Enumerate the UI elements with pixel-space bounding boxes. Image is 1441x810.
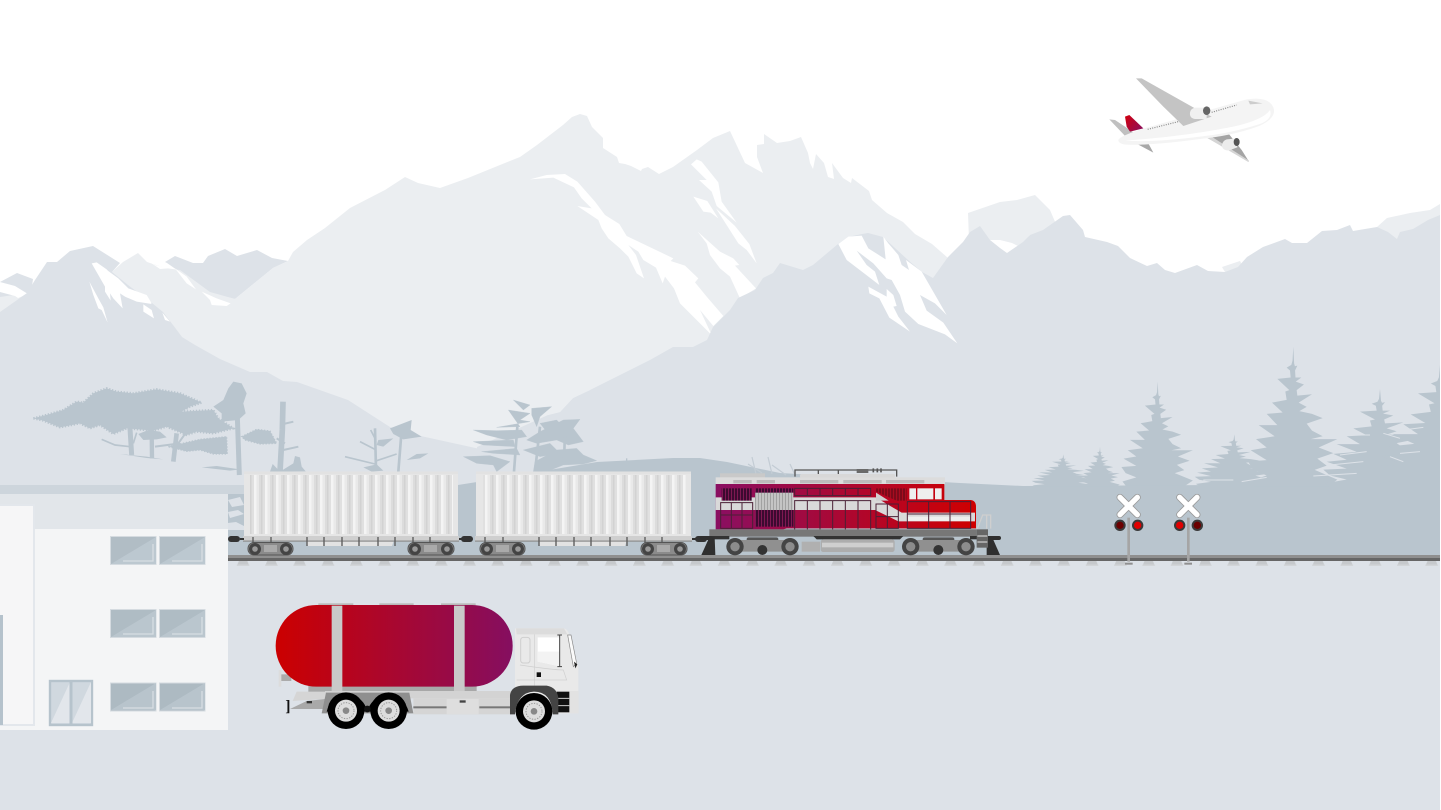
body panels	[721, 488, 971, 532]
left foreground mountain	[0, 246, 480, 560]
front steps and handrail	[977, 515, 991, 548]
axle hub	[364, 706, 371, 712]
snow on left mountain	[89, 262, 170, 323]
container 1	[244, 472, 458, 537]
rear marker: ]	[285, 698, 290, 715]
front wheel	[516, 693, 552, 730]
right margin	[1440, 0, 1441, 810]
tanker truck	[276, 603, 579, 730]
railway track	[228, 555, 1440, 568]
spruce forest	[1032, 347, 1441, 488]
light streaks of tree behind building edge	[228, 497, 244, 530]
cab white highlight	[907, 517, 971, 521]
rear chassis wedge	[290, 692, 325, 709]
rear guard	[279, 670, 291, 687]
engine grilles	[722, 488, 907, 527]
snow on right mountain	[838, 236, 957, 343]
bogies	[248, 542, 454, 555]
window rows	[1148, 105, 1237, 129]
frame rail	[325, 691, 517, 714]
snow on central mountain	[530, 159, 757, 335]
tower door	[0, 615, 3, 725]
white body stripe	[716, 497, 975, 521]
stair tower	[0, 505, 34, 725]
flatcar deck	[243, 536, 459, 546]
crossing signal right	[1174, 497, 1203, 565]
front wheel arch	[510, 686, 558, 714]
building roof band	[0, 485, 248, 494]
rear wheel 2	[370, 692, 407, 729]
locomotive	[700, 468, 1001, 555]
windows	[110, 536, 205, 711]
rear fenders	[322, 693, 413, 713]
rear wheel 1	[328, 692, 364, 729]
truck cab	[515, 628, 578, 713]
fuselage	[1118, 99, 1274, 145]
entrance door	[50, 681, 92, 725]
locomotive body	[716, 484, 976, 529]
bluish hill band	[228, 458, 1440, 558]
upper wing	[1136, 78, 1212, 126]
far mountain range	[0, 195, 1440, 315]
upper tail stabilizer	[1109, 119, 1135, 138]
cab bumper and grille	[557, 691, 579, 713]
bogies 2	[480, 542, 687, 555]
flatcar deck 2	[475, 536, 692, 546]
left tree cluster	[33, 382, 428, 475]
crossing signal left	[1114, 497, 1143, 565]
building upper wall	[0, 494, 228, 530]
upper engine	[1190, 106, 1210, 119]
front truck	[902, 537, 975, 555]
airplane	[1109, 78, 1274, 162]
rear truck	[726, 537, 799, 555]
freight car 1	[228, 472, 473, 555]
cab windows	[909, 488, 942, 499]
fuel tank	[802, 539, 895, 552]
building	[0, 485, 248, 730]
tank straps	[332, 606, 465, 691]
gradient tank	[276, 605, 513, 687]
pilots and couplers	[700, 536, 1001, 555]
lower tail	[1136, 143, 1153, 153]
lower wing	[1203, 133, 1249, 162]
building main wall	[0, 529, 228, 730]
freight car 2	[475, 472, 707, 555]
roof equipment	[720, 468, 897, 478]
middle tree cluster	[463, 400, 627, 472]
light snow-capped central mountain	[112, 114, 948, 470]
tank saddle	[308, 685, 477, 692]
underframe	[709, 529, 978, 539]
right foreground mountain	[477, 215, 1440, 560]
tank pads	[318, 603, 476, 606]
bare branches behind locomotive	[748, 457, 795, 475]
snow on left shoulder of central mountain	[147, 260, 231, 306]
couplers	[228, 536, 473, 542]
roof deck	[716, 477, 945, 485]
container 2	[476, 472, 691, 537]
tail fin	[1125, 115, 1143, 132]
ground	[0, 558, 1441, 810]
lower engine	[1222, 138, 1240, 151]
coupler 2	[692, 536, 707, 542]
